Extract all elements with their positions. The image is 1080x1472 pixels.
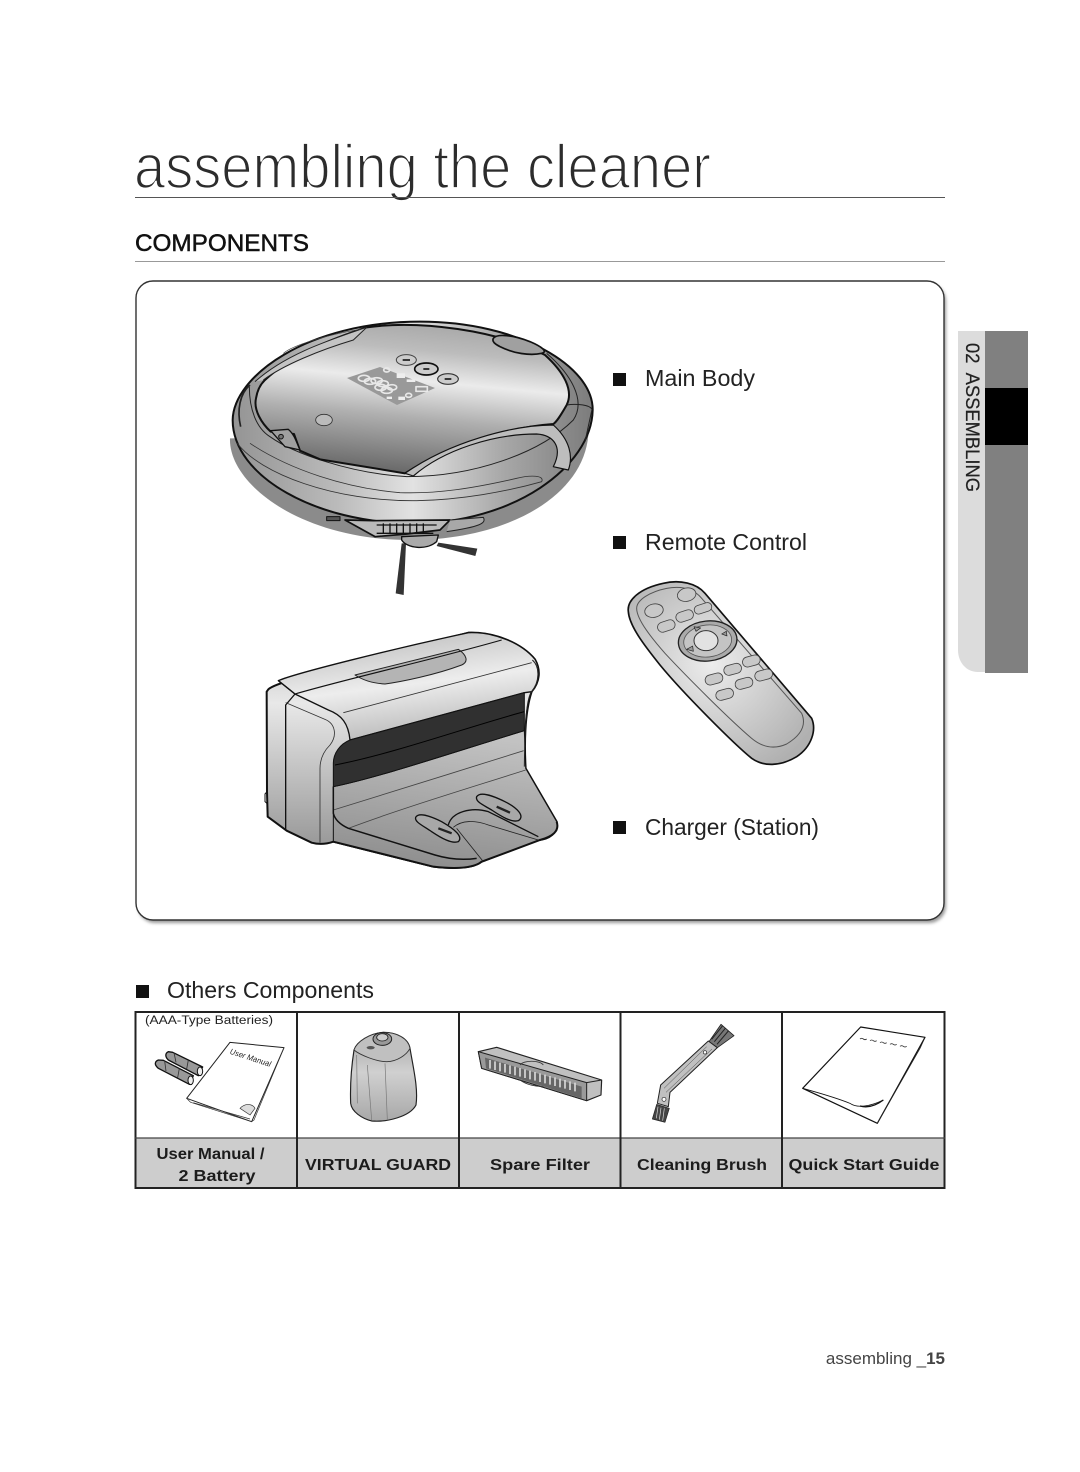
cell: quick start guide <box>803 1027 925 1123</box>
table labels: 2 Battery <box>178 1168 256 1185</box>
label: charger station: Charger (Station) <box>645 814 819 840</box>
table labels: Quick Start Guide <box>788 1157 940 1174</box>
panel: components <box>136 281 946 923</box>
cell: spare filter <box>478 1047 602 1101</box>
table: other components <box>135 1012 945 1188</box>
heading: components: COMPONENTS <box>135 230 309 257</box>
title: assembling the cleaner <box>134 133 711 202</box>
cell: virtual guard <box>351 1032 417 1121</box>
label: remote control: Remote Control <box>645 529 807 555</box>
side tab: 02 assembling: 02 ASSEMBLING <box>961 343 982 492</box>
charger station illustration <box>265 633 557 868</box>
label: main body: Main Body <box>645 365 756 391</box>
control display <box>347 367 435 405</box>
table labels: User Manual / <box>156 1146 265 1163</box>
table labels <box>156 1146 940 1185</box>
remote control illustration <box>628 582 814 764</box>
cell: user manual and batteries <box>145 1015 284 1122</box>
cell: user manual and batteries: (AAA-Type Batteries) <box>145 1015 273 1027</box>
cell: user manual and batteries: User Manual <box>229 1047 272 1069</box>
table labels: Cleaning Brush <box>637 1157 767 1174</box>
side tab: 02 assembling <box>958 331 1028 673</box>
robot main body illustration <box>230 322 593 595</box>
table labels: Spare Filter <box>490 1157 590 1174</box>
heading: others components: Others Components <box>167 977 374 1003</box>
table labels: VIRTUAL GUARD <box>305 1157 451 1174</box>
page number footer: assembling _15 <box>826 1349 945 1368</box>
cell: cleaning brush <box>652 1024 734 1122</box>
